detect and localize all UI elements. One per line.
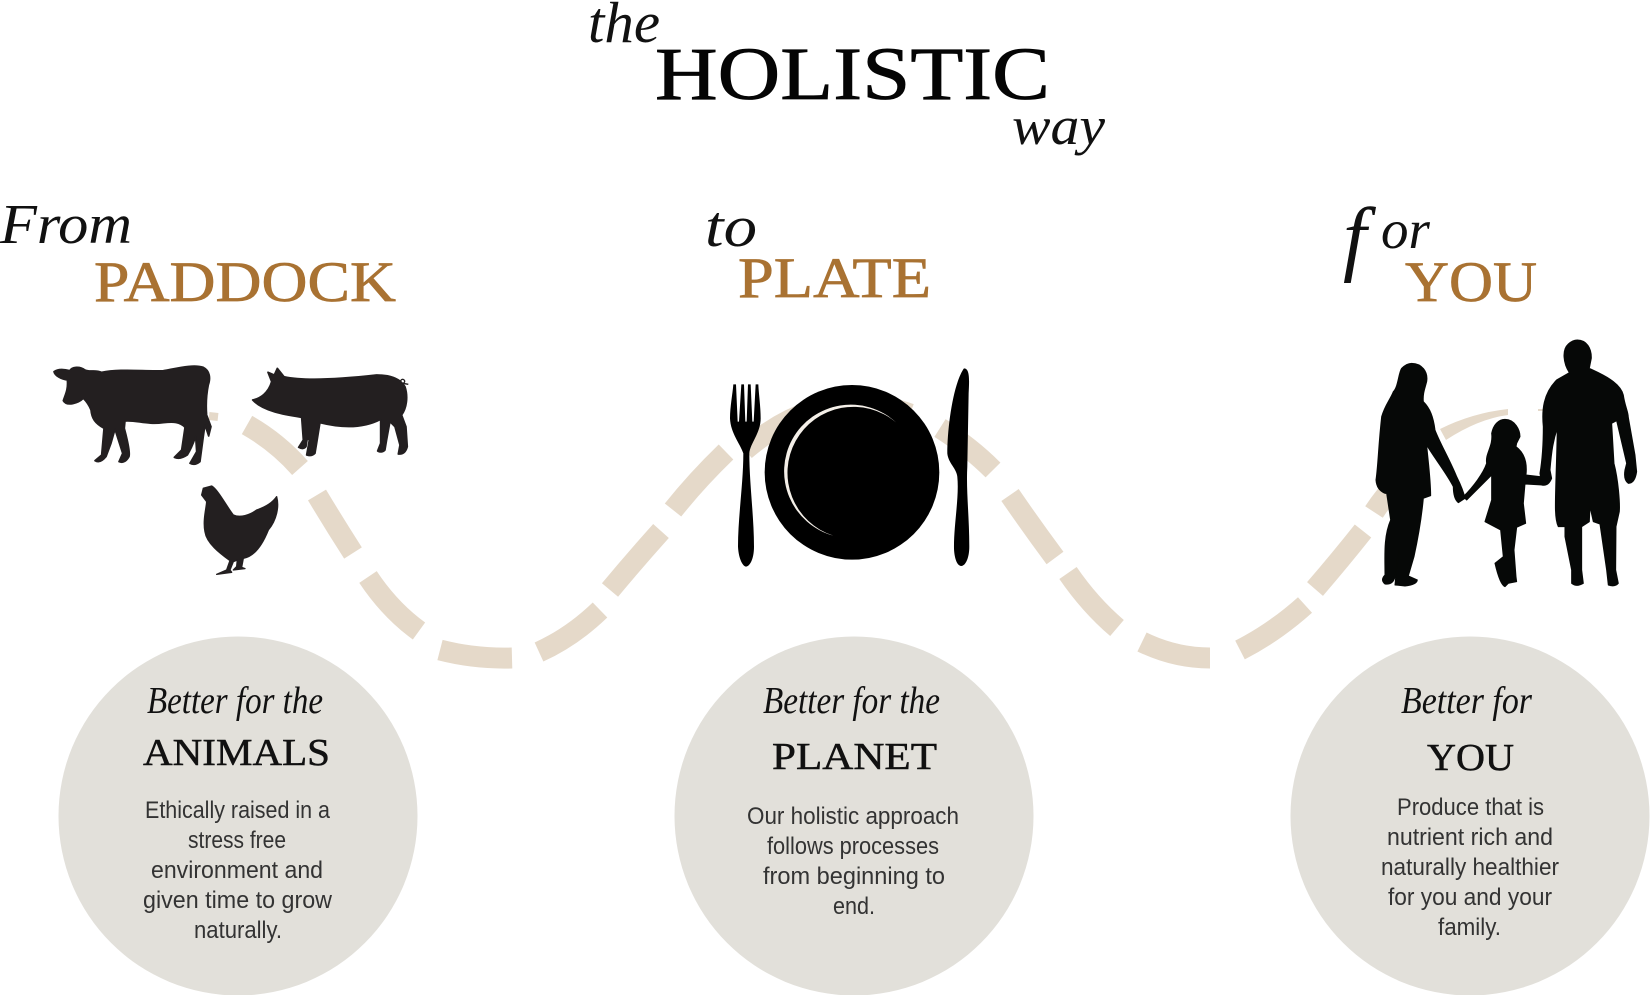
body text: naturally healthier bbox=[1381, 854, 1559, 881]
heading: from paddock: From bbox=[0, 194, 132, 256]
man bbox=[1540, 340, 1637, 586]
panel: better for you: Better for bbox=[1401, 680, 1532, 722]
dashed wave path bbox=[209, 404, 1546, 658]
child bbox=[1463, 419, 1543, 587]
body text: nutrient rich and bbox=[1387, 824, 1553, 851]
body text bbox=[747, 803, 959, 920]
body text: Our holistic approach bbox=[747, 803, 959, 830]
body text: Produce that is bbox=[1397, 794, 1544, 821]
panel: better for you bbox=[1290, 636, 1650, 995]
panel: better for the planet bbox=[674, 636, 1034, 995]
body text: for you and your bbox=[1388, 884, 1552, 911]
heading: for you: or bbox=[1381, 199, 1430, 260]
panel: better for the animals bbox=[58, 636, 418, 995]
heading: for you: YOU bbox=[1405, 251, 1537, 314]
icon: plate and cutlery bbox=[730, 368, 969, 567]
body text: naturally. bbox=[194, 917, 282, 944]
heading: from paddock bbox=[0, 194, 396, 314]
heading: for you bbox=[1343, 191, 1537, 314]
panel: better for the animals: ANIMALS bbox=[143, 732, 330, 774]
panel: better for the animals: Better for the bbox=[147, 680, 323, 722]
title bbox=[588, 0, 1105, 156]
body text: from beginning to bbox=[763, 863, 945, 890]
body text: follows processes bbox=[767, 833, 939, 860]
icon: chicken bbox=[202, 486, 278, 574]
panel: better for you: YOU bbox=[1427, 737, 1514, 779]
heading: to plate: PLATE bbox=[738, 247, 931, 310]
body text: family. bbox=[1438, 914, 1501, 941]
body text: end. bbox=[833, 893, 875, 920]
body text bbox=[143, 797, 333, 944]
body text: Ethically raised in a bbox=[145, 797, 331, 824]
title: way bbox=[1012, 96, 1105, 156]
heading: for you: f bbox=[1343, 191, 1377, 284]
woman bbox=[1376, 363, 1465, 586]
body text: given time to grow bbox=[143, 887, 333, 914]
icon: cow bbox=[54, 366, 211, 464]
heading: to plate: to bbox=[705, 194, 757, 259]
title: HOLISTIC bbox=[655, 33, 1050, 116]
body text: environment and bbox=[151, 857, 323, 884]
knife bbox=[947, 368, 969, 566]
fork bbox=[730, 384, 761, 567]
icon: family silhouette bbox=[1376, 340, 1637, 587]
panel: better for the planet: Better for the bbox=[763, 680, 940, 722]
body text bbox=[1381, 794, 1559, 941]
plate bbox=[765, 385, 939, 560]
panel: better for the planet: PLANET bbox=[772, 736, 937, 778]
heading: to plate bbox=[705, 194, 931, 310]
heading: from paddock: PADDOCK bbox=[94, 251, 396, 314]
body text: stress free bbox=[188, 827, 286, 854]
icon: pig bbox=[253, 368, 408, 456]
